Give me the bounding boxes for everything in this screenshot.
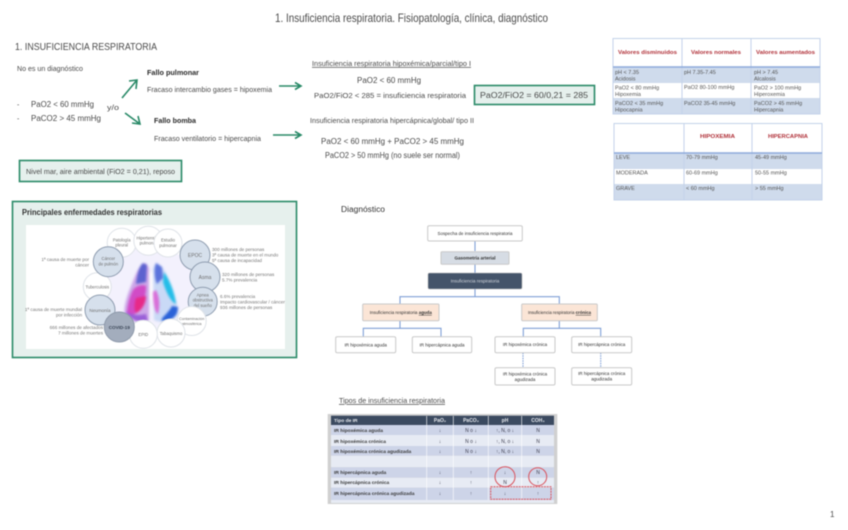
table: tipos de IR [328, 414, 557, 504]
callout: calculo [474, 86, 594, 104]
note: epoc [212, 247, 279, 263]
table: valores: Hipocapnia [615, 108, 643, 114]
circle: epoc: EPOC [188, 253, 202, 259]
table: tipos de IR: N [503, 480, 507, 486]
circle: epid: EPID [138, 332, 148, 337]
text block: hipoxemica: Insuficiencia respiratoria hipoxémica/parcial/tipo I [312, 61, 471, 68]
table: tipos de IR: N o ↓ [465, 439, 477, 445]
table: tipos de IR: ↑ [537, 491, 539, 497]
table: valores: pH 7.35-7.45 [684, 70, 716, 76]
note: epoc: 3ª causa de muerte en el mundo [212, 252, 279, 258]
table: tipos de IR: N o ↓ [465, 428, 477, 434]
callout: calculo: PaO2/FiO2 = 60/0,21 = 285 [480, 91, 589, 100]
circle: patologia pleural: pleural [115, 242, 128, 248]
box: hipoxemica cronica [495, 337, 555, 353]
table: gravedad: LEVE [616, 155, 630, 161]
text: fallo pulmonar: Fallo pulmonar [147, 70, 199, 77]
circle: contaminacion: Contaminación [179, 317, 204, 321]
table: gravedad: MODERADA [616, 170, 648, 176]
table: tipos de IR: ↑, N, o ↓ [496, 428, 514, 434]
table: tipos de IR: ↓ [504, 491, 506, 497]
table: valores: pH < 7.35 [615, 70, 639, 76]
note: asma: 320 millones de personas [222, 272, 275, 277]
circle: cancer de pulmon: Cáncer [102, 256, 116, 261]
table: tipos de IR: COH₃ [531, 418, 545, 424]
note: covid [50, 325, 104, 336]
circle: asma: Asma [199, 275, 212, 281]
highlight: red dashed box [491, 487, 551, 499]
table: tipos de IR: ↑, N, o ↓ [496, 439, 514, 445]
table: tipos de IR: N [536, 470, 540, 476]
flowchart: diagnostico [336, 226, 632, 385]
page number: 1 [830, 510, 835, 519]
table: tipos de IR: ↓ [439, 449, 441, 455]
text: fallo bomba: Fallo bomba [154, 118, 196, 125]
table: valores: Alcalosis [754, 76, 776, 82]
circle: tuberculosis: Tuberculosis [86, 284, 109, 290]
table: valores: Valores aumentados [756, 50, 815, 56]
table: tipos de IR: pH [502, 418, 509, 424]
circle: tuberculosis [83, 273, 111, 301]
table: tipos de IR: Tipo de IR [334, 418, 358, 424]
heading: principales enfermedades: Principales enfermedades respiratorias [22, 208, 163, 217]
box: hipoxemica aguda: IR hipoxémica aguda [345, 342, 387, 347]
circle: contaminacion: atmosférica [182, 322, 202, 326]
table: tipos de IR: N o ↓ [465, 449, 477, 455]
circle: apnea: obstructiva [193, 298, 213, 303]
circle: hipertension pulmonar: Hipertensión [137, 236, 161, 240]
title: 1. Insuficiencia respiratoria. Fisiopatología, clínica, diagnóstico [275, 11, 548, 25]
text block: hipercapnica [310, 118, 474, 160]
table: tipos de IR: ↑, N, o ↓ [496, 449, 514, 455]
note: asma: 5.7% prevalencia [222, 278, 258, 282]
heading: tipos de insuficiencia: Tipos de insuficiencia respiratoria [339, 396, 446, 405]
circle: tabaquismo: Tabaquismo [160, 331, 183, 336]
box: sospecha: Sospecha de insuficiencia respiratoria [438, 231, 513, 236]
note: cancer: cáncer [75, 262, 89, 268]
text: criteria: - [17, 102, 20, 109]
table: tipos de IR: ↓ [439, 480, 441, 486]
text: fallo bomba [154, 118, 261, 143]
table: tipos de IR: IR hipercápnica crónica [334, 480, 389, 486]
box: hipoxemica cronica agudizada: agudizada [515, 377, 536, 382]
arrow: to fallo pulmonar [122, 80, 137, 98]
note: apnea [220, 294, 285, 310]
icon: lungs [124, 263, 178, 323]
arrow: to hipercapnica [273, 132, 301, 138]
table: gravedad: HIPOXEMIA [700, 134, 735, 140]
table: gravedad: < 60 mmHg [686, 186, 715, 192]
table: tipos de IR: ↓ [439, 428, 441, 434]
circle: neumonia: Neumonía [89, 308, 111, 313]
table: valores: pH > 7.45 [754, 70, 778, 76]
table: valores: Valores disminuidos [618, 50, 677, 56]
circle: estudio pulmonar: pulmonar [159, 243, 177, 248]
table: tipos de IR: IR hipoxémica crónica [334, 439, 386, 445]
circle: cancer de pulmon: de pulmón [99, 262, 119, 266]
note: neumonia [25, 307, 82, 318]
note: covid: 666 millones de afectados [50, 325, 104, 330]
table: valores: PaO2 < 80 mmHg [615, 86, 659, 92]
text: fallo bomba: Fracaso ventilatorio = hipercapnia [154, 136, 261, 143]
circle: epid [129, 320, 157, 348]
image background [26, 225, 285, 349]
table: tipos de IR: ↑ [470, 491, 472, 497]
highlight: red circle pH [495, 467, 515, 487]
box: insuficiencia respiratoria: Insuficiencia respiratoria [451, 278, 500, 284]
box: cronica [522, 304, 597, 321]
table: gravedad: HIPERCAPNIA [768, 134, 808, 140]
note: epoc: 5ª causa de incapacidad [212, 258, 262, 263]
text block: hipercapnica: Insuficiencia respiratoria hipercápnica/global/ tipo II [310, 118, 474, 125]
arrow: to hipoxemica [279, 82, 301, 90]
note: epoc: 300 millones de personas [212, 247, 265, 252]
table: tipos de IR: N [536, 449, 540, 455]
table: tipos de IR: ↑ [470, 480, 472, 486]
table: tipos de IR: IR hipoxémica crónica agudizada [334, 449, 411, 455]
table: tipos de IR: IR hipercápnica aguda [334, 470, 386, 476]
table: gravedad: > 55 mmHg [755, 186, 784, 192]
note: neumonia: 1ª causa de muerte mundial [25, 307, 82, 312]
text: fallo pulmonar: Fracaso intercambio gases = hipoxemia [147, 87, 272, 94]
table: tipos de IR: ↓ [439, 491, 441, 497]
table: gravedad: 70-79 mmHg [686, 155, 718, 161]
text: criteria: PaO2 < 60 mmHg [31, 100, 94, 109]
box: insuficiencia respiratoria [428, 273, 522, 289]
callout: nivel del mar [20, 160, 182, 182]
circle: hipertension pulmonar [134, 226, 163, 255]
table: valores: PaCO2 35-45 mmHg [684, 101, 735, 107]
text: criteria: PaCO2 > 45 mmHg [31, 114, 101, 123]
table: gravedad [614, 123, 822, 200]
table: tipos de IR: ↑ [470, 470, 472, 476]
circle: tabaquismo [157, 319, 185, 347]
note: apnea: Impacto cardiovascular / cáncer [220, 300, 285, 304]
table: gravedad: 45-49 mmHg [755, 155, 787, 161]
note: cancer: 1ª causa de muerte por [41, 257, 89, 262]
circle: cancer de pulmon [93, 247, 123, 277]
text block: hipercapnica: PaCO2 > 50 mmHg (no suele ser normal) [325, 151, 460, 160]
text block: hipoxemica: PaO2/FiO2 < 285 = insuficiencia respiratoria [314, 91, 467, 100]
table: valores [613, 38, 820, 114]
note: apnea: 936 millones de personas [220, 305, 273, 310]
table: valores: Hiperoxemia [754, 92, 786, 98]
table: tipos de IR: N [536, 439, 540, 445]
highlight: red circle COH3 [529, 468, 547, 486]
text block: hipercapnica: PaO2 < 60 mmHg + PaCO2 > 45 mmHg [321, 137, 464, 146]
box: hipercapnica cronica: IR hipercápnica crónica [578, 342, 626, 347]
box: gasometria: Gasometría arterial [454, 256, 496, 260]
note: cancer [41, 257, 89, 268]
table: valores: Valores normales [691, 50, 741, 56]
text block: hipoxemica: PaO2 < 60 mmHg [357, 76, 421, 85]
box: aguda: Insuficiencia respiratoria aguda [370, 310, 432, 315]
callout: nivel del mar: Nivel mar, aire ambiental (FiO2 = 0,21), reposo [26, 169, 175, 176]
box: hipercapnica cronica agudizada [572, 368, 632, 385]
table: tipos de IR: IR hipoxémica aguda [334, 428, 383, 434]
heading: insuficiencia respiratoria: 1. INSUFICIENCIA RESPIRATORIA [15, 42, 157, 53]
table: valores: PaCO2 > 45 mmHg [754, 101, 802, 107]
table: tipos de IR: ↓ [504, 470, 506, 476]
circle: estudio pulmonar [154, 229, 182, 257]
halo [105, 246, 197, 334]
note: covid: 7 millones de muertes [58, 330, 104, 336]
circle: contaminacion [177, 306, 206, 336]
text: criteria: y/o [107, 105, 119, 112]
circle: asma [190, 262, 220, 292]
circle: estudio pulmonar: Estudio [161, 238, 176, 242]
box: hipoxemica cronica agudizada [495, 368, 555, 385]
table: tipos de IR: ↓ [439, 470, 441, 476]
table: valores: PaCO2 < 35 mmHg [615, 101, 663, 107]
note: neumonia: por infección [56, 312, 82, 318]
text: criteria [17, 100, 119, 123]
circle: apnea [188, 287, 217, 316]
arrow: to fallo bomba [125, 113, 140, 124]
table: tipos de IR: ↑ [537, 480, 539, 486]
table: valores: Hipercapnia [754, 108, 784, 114]
box: sospecha [428, 226, 522, 241]
table: tipos de IR: PaCO₂ [463, 418, 479, 424]
table: valores: PaO2 > 100 mmHg [754, 86, 801, 92]
circle: apnea: del sueño [194, 303, 212, 308]
circle: hipertension pulmonar: pulmonar [140, 240, 158, 246]
circle: covid-19: COVID-19 [109, 325, 130, 330]
box: hipercapnica cronica [572, 337, 632, 353]
table: gravedad: 50-55 mmHg [755, 170, 787, 176]
text block: hipoxemica [312, 61, 471, 100]
circle: covid-19 [104, 312, 134, 342]
box: hipoxemica cronica: IR hipoxémica crónica [503, 342, 548, 347]
box: hipoxemica aguda [336, 337, 396, 353]
box: hipoxemica cronica agudizada: IR hipoxémica crónica [503, 372, 548, 376]
text: criteria: - [17, 116, 20, 123]
table: tipos de IR: PaO₂ [434, 418, 446, 424]
table: gravedad: 60-69 mmHg [686, 170, 718, 176]
table: valores: Hipoxemia [615, 92, 642, 98]
panel: principales enfermedades [12, 202, 296, 358]
circle: patologia pleural: Patología [113, 238, 131, 242]
table: tipos de IR: IR hipercápnica crónica agudizada [334, 491, 415, 497]
circle: patologia pleural [107, 228, 136, 257]
text: definition: No es un diagnóstico [17, 66, 83, 73]
box: hipercapnica aguda: IR hipercápnica aguda [419, 342, 465, 347]
circle: epoc [180, 240, 210, 270]
table: tipos de IR: N [536, 428, 540, 434]
box: hipercapnica cronica agudizada: agudizada [591, 376, 613, 382]
box: gasometria [441, 252, 509, 264]
table: tipos de IR: ↓ [439, 439, 441, 445]
note: apnea: 6.6% prevalencia [220, 294, 256, 299]
circle: apnea: Apnea [197, 292, 209, 298]
table: gravedad: GRAVE [616, 186, 635, 192]
text: fallo pulmonar [147, 70, 272, 94]
box: hipercapnica cronica agudizada: IR hipercápnica crónica [578, 371, 626, 376]
heading: diagnostico: Diagnóstico [341, 205, 386, 214]
box: cronica: Insuficiencia respiratoria crónica [528, 310, 591, 315]
note: asma [222, 272, 275, 282]
circle: neumonia [85, 295, 115, 325]
box: hipercapnica aguda [412, 337, 472, 353]
table: valores: Acidosis [615, 76, 636, 82]
table: valores: PaO2 80-100 mmHg [684, 85, 734, 91]
box: aguda [363, 304, 439, 321]
